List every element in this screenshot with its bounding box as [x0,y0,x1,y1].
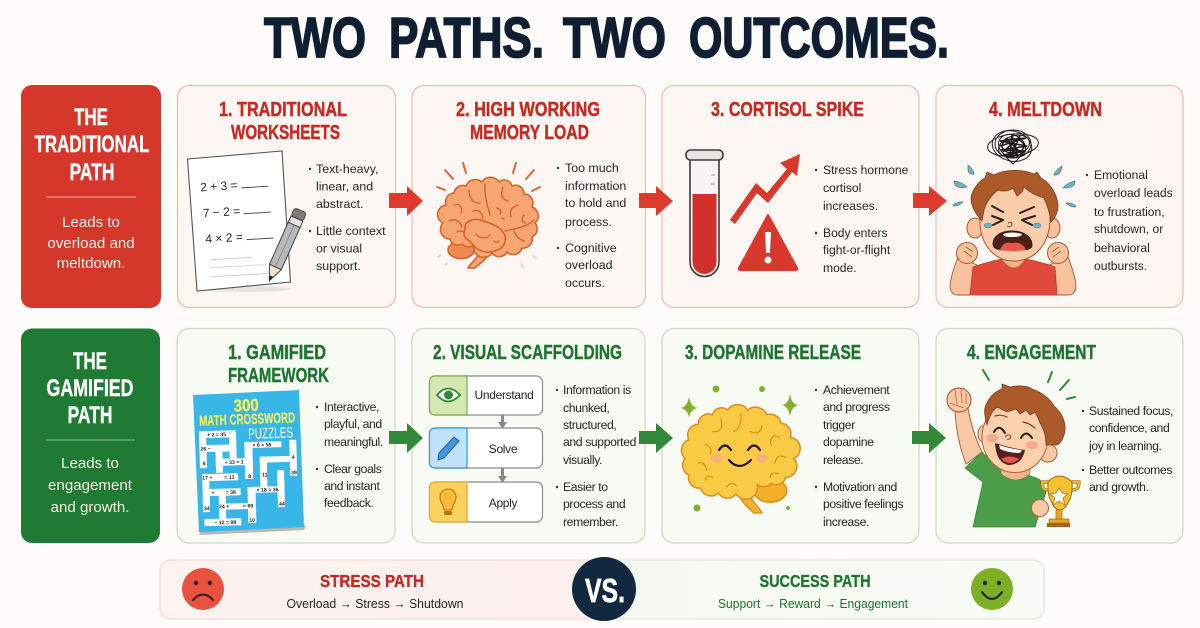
text: meltdown bullets: shutdown, or [1094,222,1163,236]
flow: solve [430,428,542,468]
panel: the traditional path: Leads to [62,214,120,231]
icon: math crossword book: + 2 = 35 [207,432,226,439]
flow: understand [430,376,542,415]
title: OUTCOMES. [689,6,949,70]
panel: the gamified path: Leads to [61,455,119,472]
arrow: worksheets to memory load [389,186,423,216]
text: success path [718,571,908,611]
arrow: solve to apply [498,468,507,483]
badge: vs: VS. [585,572,625,609]
icon: worksheet and pencil: 4 × 2 = [205,230,243,246]
icon: math crossword book: 8 [248,474,251,480]
text: visual scaffolding bullets: Easier to [563,480,608,494]
icon: happy face [971,568,1013,610]
text: gamified framework bullets [316,400,383,510]
heading: traditional worksheets [219,98,347,144]
text: cortisol bullets: Body enters [823,226,888,240]
text: dopamine bullets: trigger [823,418,855,432]
text: engagement bullets [1082,404,1173,494]
arrow: dopamine to engagement [912,423,946,453]
panel: the gamified path [21,328,160,543]
panel: traditional worksheets [178,86,396,308]
text: memory load bullets: overload [565,258,613,272]
icon: test tube [686,150,723,276]
heading: gamified framework [228,341,329,387]
text: traditional worksheets bullets: Text-heavy, [316,162,378,176]
icon: math crossword book: × 6 = 56 [252,442,272,449]
text: visual scaffolding bullets: chunked, [563,401,609,415]
text: stress path: Overload → Stress → Shutdown [286,597,464,611]
flow: apply: Apply [489,496,518,510]
text: dopamine bullets: and progress [823,400,890,414]
badge: vs [572,557,636,621]
text: visual scaffolding bullets: process and [563,497,625,511]
text: gamified framework bullets: Clear goals [324,462,382,476]
icon: worksheet and pencil: 7 − 2 = [202,204,241,220]
panel: the gamified path: engagement [48,477,133,494]
heading: high working memory load [456,98,600,144]
icon: math crossword book: MATH CROSSWORD [199,410,295,430]
icon: math crossword book: 44 [279,502,285,508]
heading: gamified framework: FRAMEWORK [228,364,329,387]
panel: visual scaffolding [412,328,645,543]
panel: the gamified path: GAMIFIED [46,375,134,402]
text: engagement bullets: Better outcomes [1089,463,1172,477]
text: traditional worksheets bullets: or visual [316,242,362,256]
flow: understand: Understand [474,388,534,402]
text: dopamine bullets [815,383,904,529]
icon: math crossword book: 10 [249,518,255,524]
icon: worksheet and pencil [188,151,307,292]
text: meltdown bullets: outbursts. [1094,259,1147,273]
text: dopamine bullets: Motivation and [823,480,897,494]
arrow: memory load to cortisol [639,186,673,216]
heading: visual scaffolding: 2. VISUAL SCAFFOLDING [433,341,622,364]
icon: math crossword book: + [212,490,215,496]
heading: traditional worksheets: WORKSHEETS [231,121,340,144]
panel: meltdown [936,86,1183,308]
heading: gamified framework: 1. GAMIFIED [228,341,326,364]
panel: the traditional path: overload and [47,235,135,252]
arrow: understand to solve [498,415,507,429]
panel: engagement [936,328,1183,543]
text: gamified framework bullets: Interactive, [324,400,379,414]
panel: the traditional path: THE [74,104,108,131]
icon: math crossword book: − 12 = 98 [214,520,236,526]
icon: math crossword book: PUZZLES [248,424,293,443]
arrow: cortisol to meltdown [913,186,947,216]
text: gamified framework bullets: meaningful. [324,435,383,449]
icon: math crossword book [193,390,306,535]
panel: the traditional path: PATH [70,159,114,186]
icon: math crossword book: = 13 [224,475,235,481]
text: memory load bullets [557,161,626,290]
text: cortisol bullets [815,163,909,275]
text: memory load bullets: process. [565,215,612,229]
icon: math crossword book: ÷ 33 = 1 [225,460,244,466]
text: cortisol bullets: fight-or-flight [823,243,891,257]
title: TWO [563,6,666,70]
text: dopamine bullets: positive feelings [823,497,904,511]
trophy [1042,476,1079,527]
text: memory load bullets: Cognitive [565,241,617,255]
icon: overloaded brain [437,163,540,268]
flow: solve: Solve [489,442,518,456]
text: cortisol bullets: increases. [823,199,878,213]
text: cortisol bullets: Stress hormone [823,163,909,177]
heading: high working memory load: 2. HIGH WORKING [456,98,600,121]
panel: the traditional path: meltdown. [57,255,125,272]
icon: math crossword book: = 69 [243,503,253,510]
text: gamified framework bullets: and instant [324,479,380,493]
icon: math crossword book: 24 + [219,504,229,510]
icon: math crossword book: 26 − [200,446,211,453]
heading: traditional worksheets: 1. TRADITIONAL [219,98,347,121]
text: dopamine bullets: release. [823,453,863,467]
icon: crying boy [950,165,1076,295]
text: memory load bullets: to hold and [565,196,626,210]
title: PATHS. [389,6,544,70]
text: meltdown bullets: overload leads [1094,186,1173,200]
text: gamified framework bullets: feedback. [324,496,373,510]
text: meltdown bullets: Emotional [1094,168,1148,182]
panel: the gamified path: and growth. [51,499,129,516]
text: cortisol bullets: cortisol [823,181,861,195]
panel: the traditional path [21,85,161,308]
panel: the gamified path: PATH [68,402,112,429]
text: dopamine bullets: increase. [823,515,869,529]
text: traditional worksheets bullets: Little context [316,224,386,238]
heading: meltdown: 4. MELTDOWN [989,98,1102,121]
panel: dopamine release [662,328,919,543]
icon: math crossword book: 39 [291,470,297,476]
text: meltdown bullets [1086,168,1173,273]
text: engagement bullets: Sustained focus, [1089,404,1173,418]
text: stress path: STRESS PATH [320,571,424,591]
icon: math crossword book: 34 [204,506,210,512]
panel: the traditional path: TRADITIONAL [34,131,150,158]
text: engagement bullets: joy in learning. [1088,439,1162,453]
icon: scribble cloud [986,127,1040,165]
icon: math crossword book: 17 + [202,475,213,482]
panel: the gamified path: THE [73,348,107,375]
arrow: scaffolding to dopamine [639,423,673,453]
left arm [950,257,977,295]
icon: rising arrow [730,154,800,224]
text: memory load bullets: Too much [565,161,619,175]
flow: apply [430,482,542,522]
panel: comparison bar [160,557,1044,621]
title: TWO [264,6,366,70]
icon: worksheet and pencil: 2 + 3 = [200,178,238,194]
text: visual scaffolding bullets: and supported [563,435,636,449]
text: traditional worksheets bullets: linear, and [316,180,373,194]
text: memory load bullets: occurs. [565,276,605,290]
icon: sparkles [681,386,798,512]
text: success path: Support → Reward → Engagement [718,597,908,611]
text: memory load bullets: information [565,179,626,193]
text: cortisol bullets: mode. [823,261,857,275]
heading: high working memory load: MEMORY LOAD [470,121,589,144]
text: engagement bullets: confidence, and [1089,421,1169,435]
panel: cortisol spike [662,86,919,308]
icon: happy brain [682,405,800,513]
text: meltdown bullets: to frustration, [1094,205,1165,219]
panel: high working memory load [412,86,646,308]
text: stress path [286,571,464,611]
panel: gamified framework [177,328,395,543]
text: dopamine bullets: dopamine [823,435,874,449]
arrow: framework to scaffolding [389,423,423,453]
text: visual scaffolding bullets: visually. [563,453,602,467]
icon: math crossword book: 300 [233,396,259,415]
text: dopamine bullets: Achievement [823,383,890,397]
icon: math crossword book: = 38 [226,490,236,496]
text: visual scaffolding bullets [556,383,636,529]
icon: math crossword book: × 18 = 36 [256,487,279,494]
text: success path: SUCCESS PATH [760,571,870,591]
icon: math crossword book: 6 [203,461,206,467]
icon: sad face [182,568,224,610]
text: traditional worksheets bullets [309,162,386,273]
icon: warning triangle [739,215,797,270]
text: engagement bullets: and growth. [1089,480,1149,494]
text: traditional worksheets bullets: support. [316,259,361,273]
heading: dopamine release: 3. DOPAMINE RELEASE [685,341,861,364]
text: meltdown bullets: behavioral [1094,241,1150,255]
text: visual scaffolding bullets: structured, [563,418,616,432]
text: gamified framework bullets: playful, and [324,417,382,431]
text: visual scaffolding bullets: Information is [563,383,631,397]
title [264,6,949,70]
heading: engagement: 4. ENGAGEMENT [967,341,1096,364]
text: traditional worksheets bullets: abstract. [316,197,364,211]
text: visual scaffolding bullets: remember. [563,515,618,529]
icon: happy boy with trophy [947,370,1079,527]
icon: math crossword book: 4 [292,455,295,461]
heading: cortisol spike: 3. CORTISOL SPIKE [711,98,864,121]
icon: math crossword book: 11 [262,472,268,479]
